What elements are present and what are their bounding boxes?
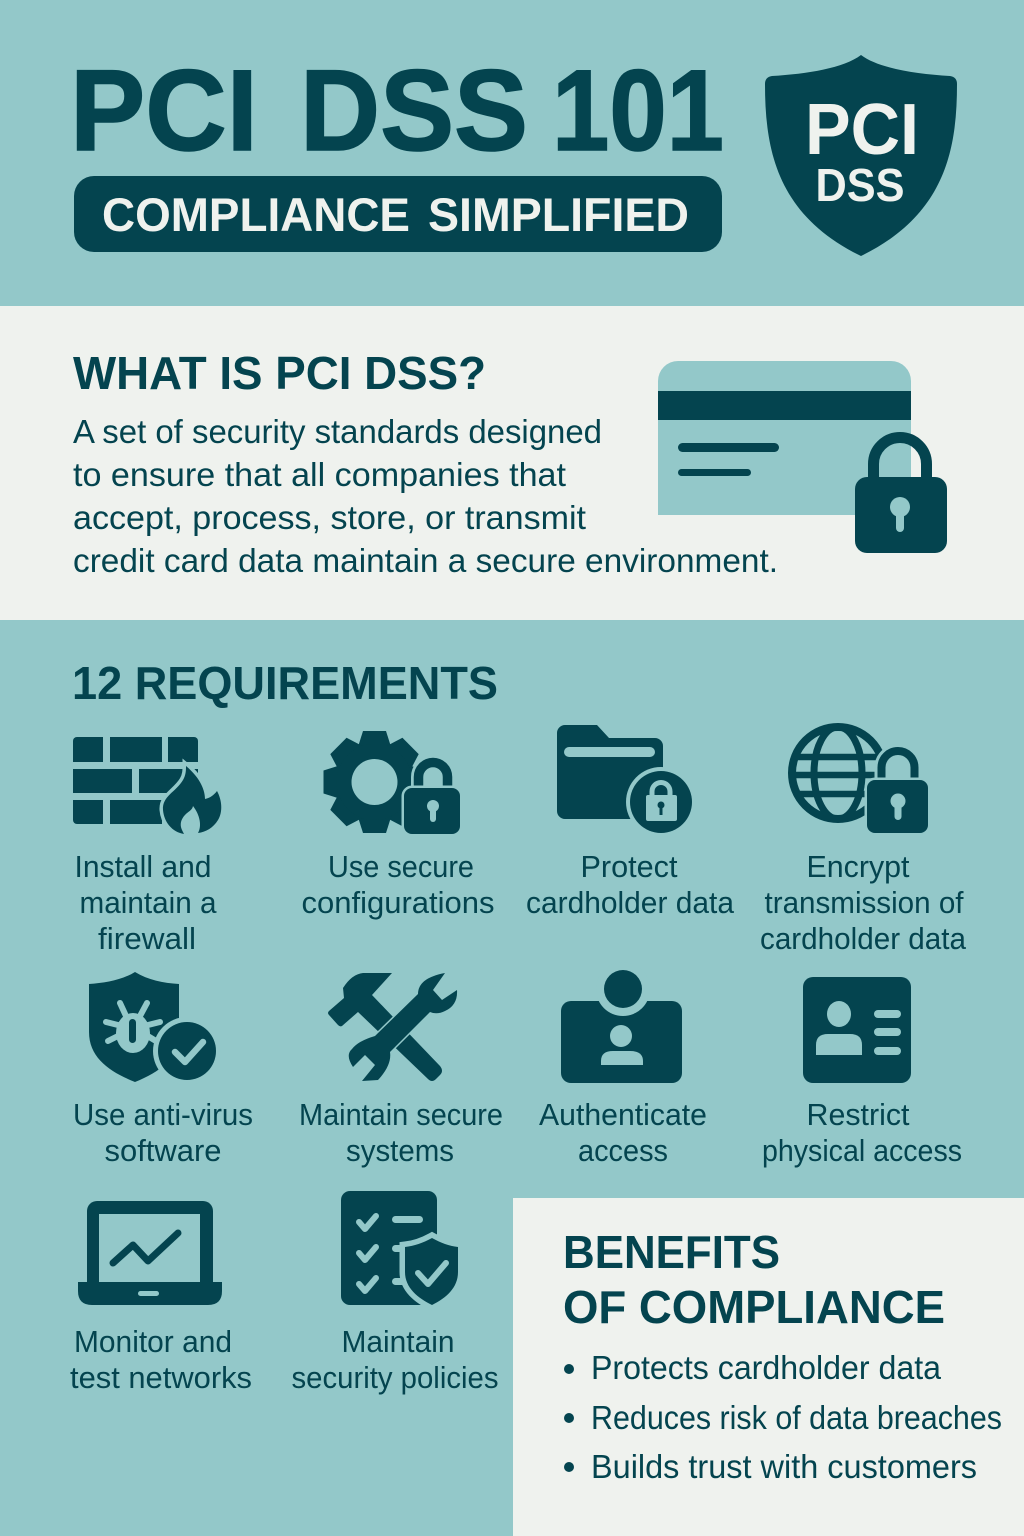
requirement 4: encrypt transmission: [760, 727, 967, 956]
label: Encrypt: [806, 849, 910, 884]
heading: benefits: BENEFITS: [563, 1226, 780, 1278]
subtitle pill: SIMPLIFIED: [428, 188, 689, 241]
description text: [73, 413, 778, 579]
title: DSS: [300, 47, 528, 175]
benefits list: Builds trust with customers: [591, 1448, 977, 1485]
description text: to ensure that all companies that: [73, 456, 566, 493]
requirement 6: maintain systems: systems: [346, 1133, 454, 1168]
requirement 7: authenticate: [539, 962, 707, 1168]
icon: PCI DSS shield: PCI: [805, 90, 919, 170]
heading: what is PCI DSS: WHAT IS PCI DSS?: [73, 347, 486, 399]
requirement 6: maintain systems: [299, 973, 503, 1168]
requirement 2: secure configurations: [302, 731, 494, 920]
icon: user badge: [561, 962, 682, 1083]
icon: checklist with shield: [341, 1191, 458, 1305]
requirement 1: firewall: firewall: [98, 921, 196, 956]
label: Maintain secure: [299, 1097, 503, 1132]
icon: globe with lock: [792, 727, 928, 833]
label: Use secure: [328, 849, 474, 884]
panel: benefits of compliance: [513, 1198, 1024, 1536]
icon: ID card: [803, 977, 911, 1083]
requirement 3: protect cardholder data: [526, 725, 735, 920]
requirement 1: firewall: maintain a: [80, 885, 217, 920]
requirement 10: policies: [292, 1191, 498, 1395]
description text: accept, process, store, or transmit: [73, 499, 586, 536]
label: Install and: [74, 849, 212, 884]
title: [70, 47, 724, 175]
requirement 3: protect cardholder data: cardholder data: [526, 885, 735, 920]
icon: PCI DSS shield: [765, 55, 957, 256]
icon: PCI DSS shield: DSS: [816, 159, 904, 211]
heading: benefits: [563, 1226, 945, 1333]
requirement 5: anti-virus: software: [104, 1133, 222, 1168]
heading: 12 requirements: 12 REQUIREMENTS: [72, 657, 498, 709]
label: Authenticate: [539, 1097, 707, 1132]
label: Maintain: [342, 1324, 454, 1359]
label: Use anti-virus: [73, 1097, 253, 1132]
description text: A set of security standards designed: [73, 413, 602, 450]
requirement 7: authenticate: access: [578, 1133, 668, 1168]
label: Monitor and: [74, 1324, 232, 1359]
icon: shield with bug and check: [89, 972, 221, 1085]
requirement 9: monitor: test networks: [70, 1360, 252, 1395]
subtitle pill: [74, 176, 722, 252]
description text: credit card data maintain a secure environment.: [73, 542, 778, 579]
title: 101: [552, 47, 724, 175]
requirement 8: physical access: [762, 977, 962, 1168]
label: Protect: [580, 849, 678, 884]
requirement 9: monitor: [70, 1201, 252, 1395]
icon: folder with lock: [557, 725, 696, 837]
label: Restrict: [806, 1097, 910, 1132]
benefits list: Protects cardholder data: [591, 1349, 942, 1386]
benefits list: [564, 1349, 1002, 1485]
header panel: [70, 47, 957, 256]
icon: brick wall with flame: [73, 737, 221, 834]
icon: gear with lock: [324, 731, 460, 834]
subtitle pill: COMPLIANCE: [102, 188, 410, 241]
requirement 1: firewall: [73, 737, 221, 956]
icon: laptop with line chart: [78, 1201, 222, 1305]
requirement 4: encrypt transmission: cardholder data: [760, 921, 967, 956]
requirement 10: policies: security policies: [292, 1360, 498, 1395]
requirement 2: secure configurations: configurations: [302, 885, 494, 920]
requirement 8: physical access: physical access: [762, 1133, 962, 1168]
requirement 5: anti-virus: [73, 972, 253, 1168]
icon: hammer and wrench: [328, 973, 457, 1081]
icon: credit card with lock: [658, 361, 947, 553]
title: PCI: [70, 47, 258, 175]
panel: what is PCI DSS: [0, 306, 1024, 620]
requirement 4: encrypt transmission: transmission of: [764, 885, 964, 920]
heading: benefits: OF COMPLIANCE: [563, 1281, 945, 1333]
benefits list: Reduces risk of data breaches: [591, 1399, 1002, 1436]
